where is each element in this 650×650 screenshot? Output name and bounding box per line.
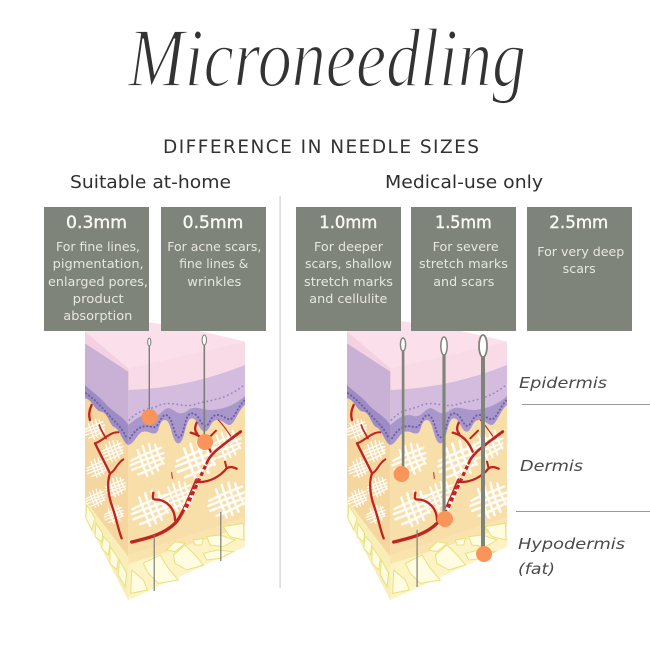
heading: medical-use only: Medical-use only [385, 172, 543, 193]
card: 0.3mm: For fine lines, [56, 239, 140, 254]
card: 1.5mm [411, 207, 516, 331]
card: 0.3mm: enlarged pores, [48, 274, 148, 289]
card: 0.3mm: 0.3mm [66, 213, 127, 233]
card: 1.5mm: For severe [433, 239, 499, 254]
needle 0.5mm [197, 335, 213, 450]
card: 1.5mm: stretch marks [419, 256, 508, 271]
card: 0.5mm: fine lines & [179, 256, 249, 271]
card: 0.3mm: absorption [63, 308, 132, 323]
needle tails [154, 512, 221, 591]
card: 0.5mm [161, 207, 266, 331]
label: dermis: Dermis [520, 457, 583, 475]
card: 0.3mm [44, 207, 149, 331]
card: 1.0mm: For deeper [314, 239, 384, 254]
heading: suitable at-home: Suitable at-home [70, 172, 231, 193]
needle 1.0mm [394, 338, 410, 482]
card: 0.5mm: 0.5mm [183, 213, 243, 233]
skin diagram: medical needles [346, 318, 507, 600]
skin diagram: at-home needles [84, 318, 245, 600]
card: 1.0mm [296, 207, 401, 331]
card: 0.5mm: For acne scars, [167, 239, 261, 254]
label: hypodermis (fat): (fat) [518, 560, 555, 578]
title: Microneedling [127, 12, 526, 105]
card: 1.0mm: stretch marks [304, 274, 393, 289]
needle 0.3mm [142, 338, 158, 425]
card: 2.5mm: scars [563, 261, 596, 276]
card: 2.5mm: For very deep [537, 244, 624, 259]
needle 2.5mm [476, 335, 492, 562]
card: 2.5mm [527, 207, 632, 331]
card: 1.5mm: 1.5mm [435, 213, 492, 233]
card: 0.5mm: wrinkles [187, 274, 241, 289]
card: 1.0mm: 1.0mm [319, 213, 377, 233]
label: epidermis: Epidermis [519, 374, 607, 392]
card: 1.5mm: and scars [433, 274, 494, 289]
label: hypodermis (fat) [518, 535, 625, 578]
card: 0.3mm: pigmentation, [53, 256, 144, 271]
label: hypodermis (fat): Hypodermis [518, 535, 625, 553]
subtitle: DIFFERENCE IN NEEDLE SIZES [163, 137, 479, 158]
card: 0.3mm: product [73, 291, 124, 306]
needle tail [416, 530, 418, 587]
card: 2.5mm: 2.5mm [549, 213, 608, 233]
card: 1.0mm: scars, shallow [305, 256, 392, 271]
card: 1.0mm: and cellulite [309, 291, 388, 306]
needle 1.5mm [437, 337, 453, 527]
